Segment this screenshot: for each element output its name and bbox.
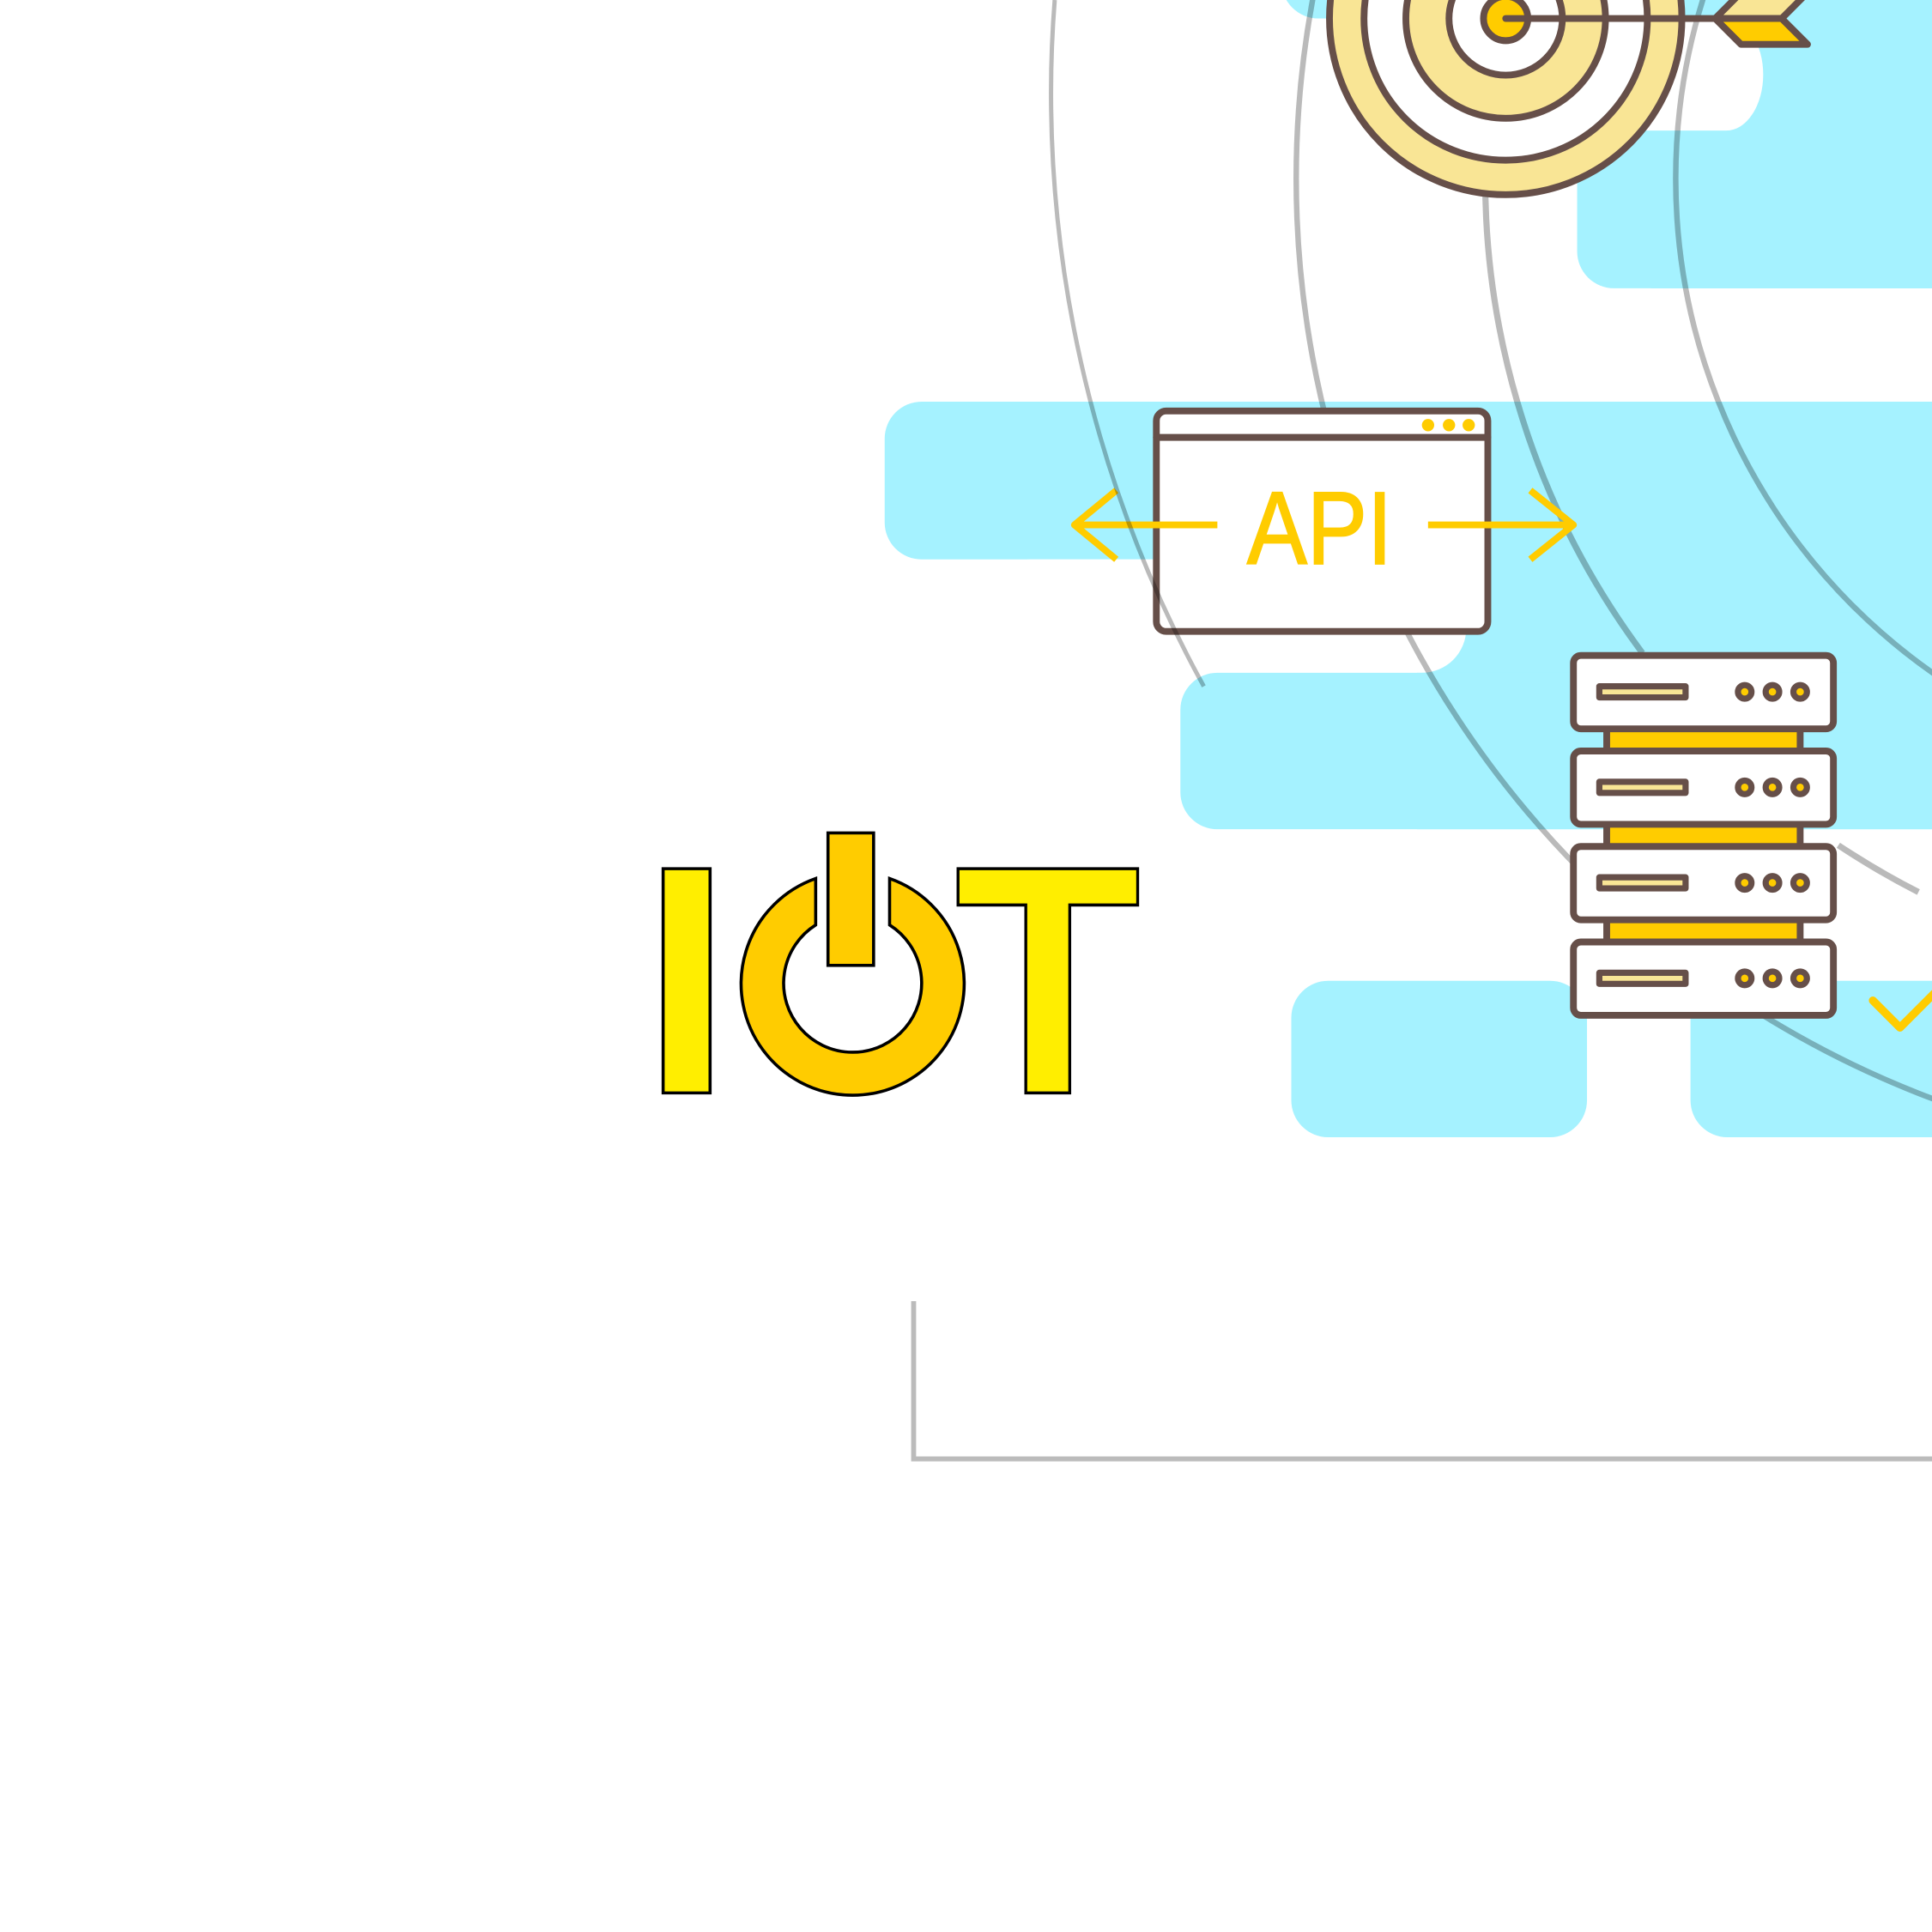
letter T: T — [954, 798, 1141, 1162]
panel: pale blue background bars — [885, 0, 1932, 1137]
icon: target with arrow — [1329, 0, 1808, 195]
arrow: API right — [1428, 490, 1573, 560]
bracket line — [913, 1301, 1932, 1459]
arrow: API left — [1075, 490, 1217, 560]
icon: power symbol — [742, 833, 964, 1095]
API label: API — [1247, 470, 1392, 586]
title: IOT logo — [641, 798, 1141, 1162]
outer connection arc — [1051, 0, 1204, 687]
letter I: I — [641, 798, 732, 1162]
connection arcs — [1296, 0, 1932, 1162]
icon: API window — [1156, 411, 1487, 632]
icon: server rack — [1573, 656, 1833, 1015]
icon: check mark — [1873, 987, 1932, 1027]
